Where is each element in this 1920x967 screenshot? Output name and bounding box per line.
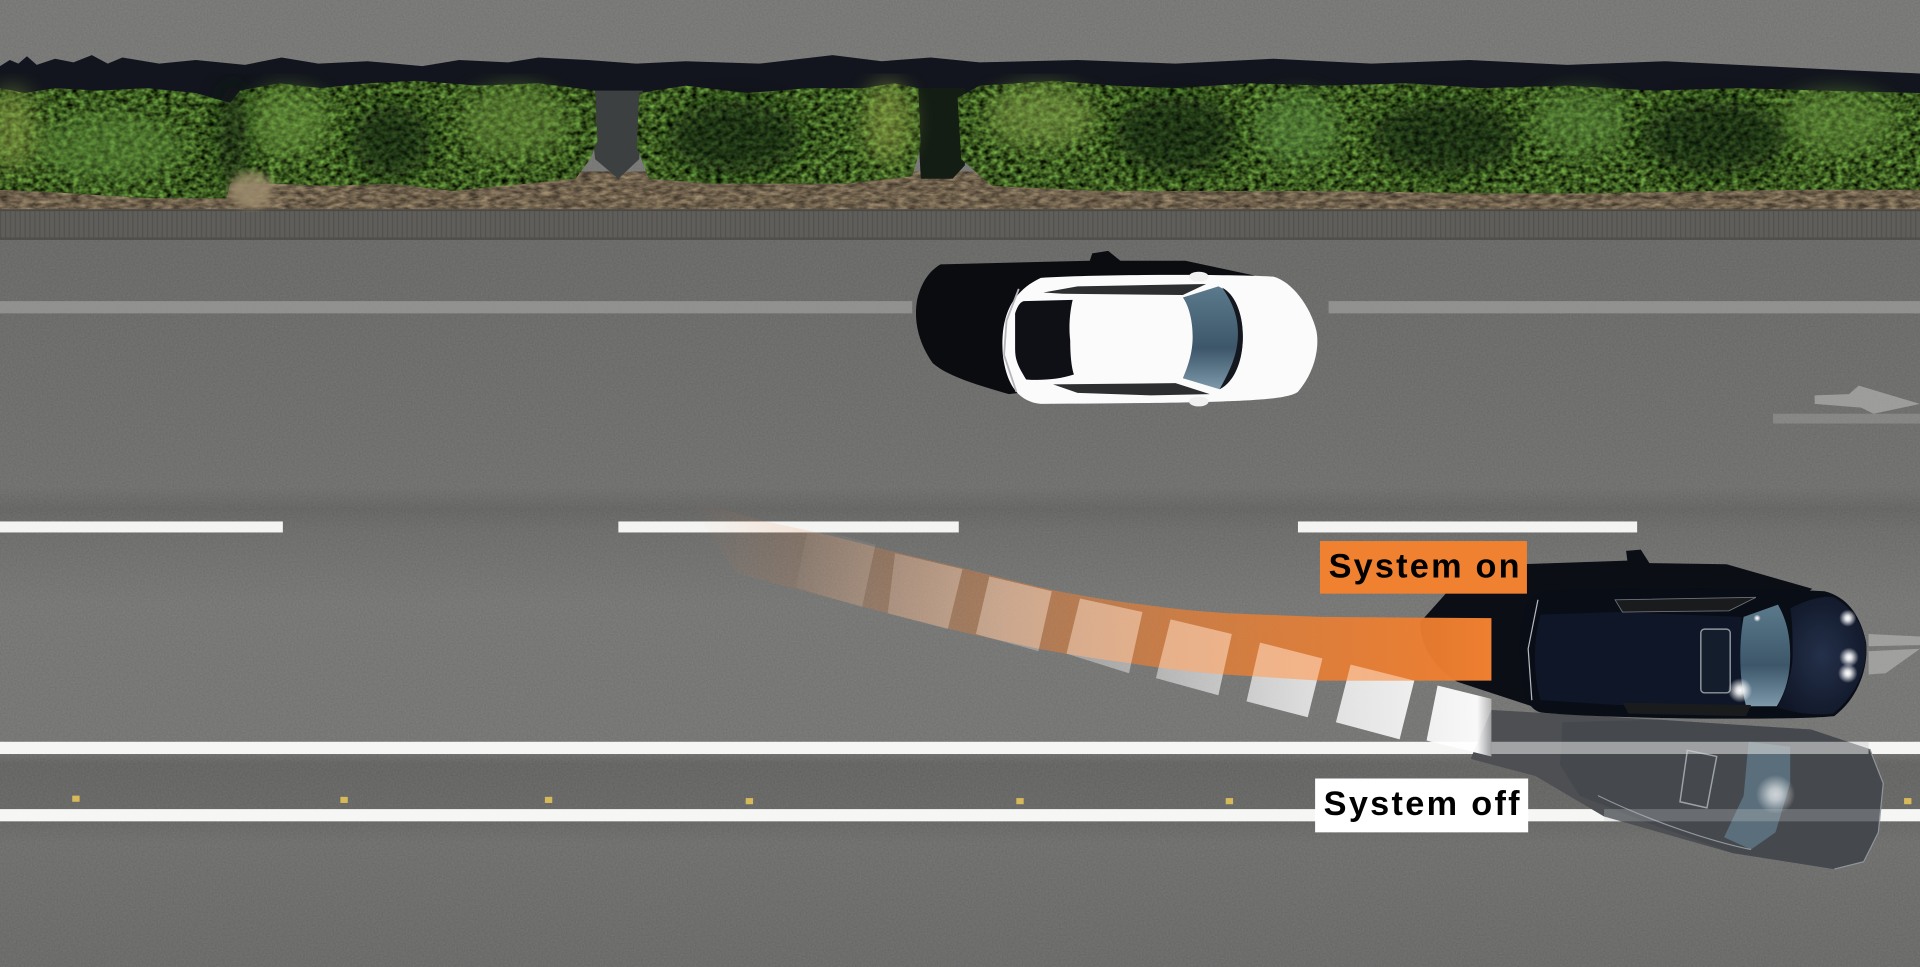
white car with shadow [916, 251, 1317, 406]
ghost car shadow and body [1471, 710, 1883, 869]
black car windshield [1740, 605, 1790, 706]
squares over ribbon [822, 534, 1414, 680]
white car trim [1004, 289, 1019, 392]
black car roof [1535, 612, 1746, 705]
hedge [0, 81, 1920, 208]
label: system off: System off [1324, 785, 1520, 823]
label: system off [1315, 778, 1528, 832]
ghost car sunroof [1680, 750, 1717, 808]
dashed lane markings [0, 521, 1637, 532]
hedge gap: dry brush [588, 91, 643, 179]
black car sun glints [1839, 610, 1856, 627]
black car side windows [1615, 597, 1756, 612]
ghost car outline [1598, 749, 1883, 869]
ghost car glare [1756, 775, 1795, 814]
dry leaf patch [229, 171, 273, 208]
black car body [1520, 588, 1866, 719]
ghost car windshield [1724, 742, 1790, 849]
worn upper lane line [0, 301, 1920, 313]
white car windshield [1183, 286, 1243, 389]
hedge foliage [0, 81, 1920, 198]
white car body [1002, 275, 1317, 404]
black car hood [1778, 597, 1866, 714]
white car side windows [1043, 284, 1206, 295]
system on path: orange ribbon [689, 499, 1491, 681]
hedge gap: dark [916, 88, 965, 179]
hedge shadow [0, 55, 1920, 110]
white car rear window [1015, 300, 1074, 380]
ghost car: system off path [1471, 710, 1883, 869]
black car sunroof [1701, 629, 1730, 693]
dirt verge [0, 171, 1920, 209]
label: system on: System on [1329, 548, 1520, 586]
white car shadow [916, 251, 1254, 394]
black car shadow [1420, 550, 1812, 710]
label: system on [1320, 541, 1527, 594]
black car trim [1528, 600, 1538, 700]
curb gutter [0, 209, 1920, 240]
solid edge lines [0, 742, 1920, 821]
hedge sunlit and shaded clumps [0, 81, 1898, 189]
road reflectors [72, 796, 1911, 804]
black car with shadow [1420, 550, 1866, 719]
road arrow markings [1773, 386, 1920, 674]
system off path: white squares [796, 526, 1491, 756]
